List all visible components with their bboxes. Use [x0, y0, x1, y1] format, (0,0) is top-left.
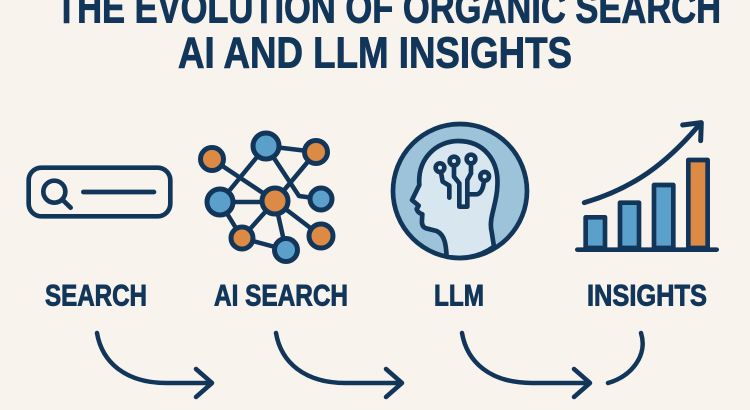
- icon: bar chart with arrow: [577, 123, 717, 250]
- label: ai search: AI SEARCH: [214, 280, 348, 312]
- arrow 3: [462, 333, 590, 397]
- label: llm: LLM: [434, 280, 484, 312]
- label: insights: INSIGHTS: [587, 280, 707, 312]
- icon: head in circle: [393, 124, 527, 258]
- title: AI AND LLM INSIGHTS: [178, 28, 572, 78]
- arrow 2: [276, 333, 402, 397]
- icon: network: [200, 133, 333, 262]
- title: [56, 0, 721, 78]
- icon: search bar: [29, 168, 170, 216]
- label: search: SEARCH: [45, 280, 147, 312]
- arrow 4: curved stroke: [608, 333, 643, 383]
- arrow 1: [97, 333, 212, 397]
